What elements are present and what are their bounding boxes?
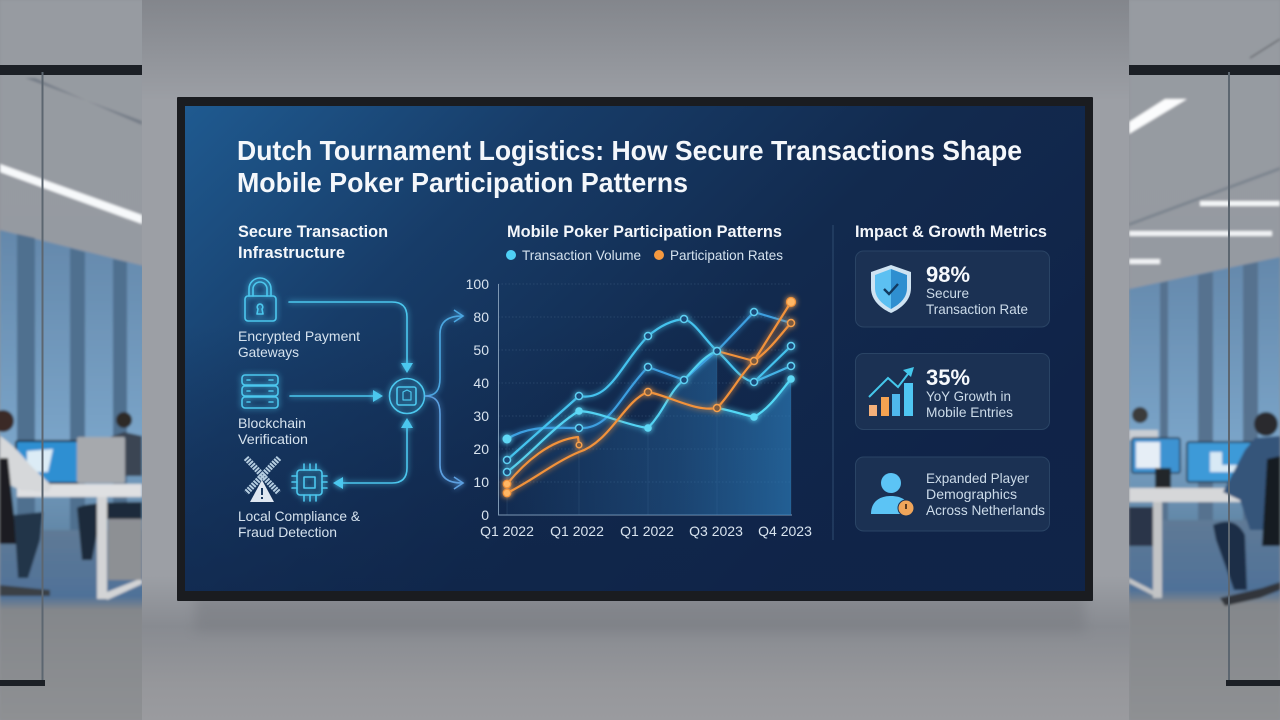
heading: infrastructure: Infrastructure [238,243,345,262]
heading: infrastructure: Secure Transaction [238,222,388,241]
x-axis labels: Q1 2022 [620,523,674,539]
y-axis labels: 10 [473,474,489,490]
label: local compliance and fraud detection: Fraud Detection [238,524,337,540]
arrow: compliance to hub [333,418,413,489]
label: encrypted payment gateways: Encrypted Payment [238,328,360,344]
panel: secure transaction infrastructure [238,222,463,540]
title: Dutch Tournament Logistics: How Secure Transactions Shape [237,135,1022,166]
text: demographics: Across Netherlands [926,502,1045,518]
card: mobile entry growth [856,354,1050,430]
background: left office view [0,0,144,720]
icon: shield [871,265,911,313]
y-axis labels: 40 [473,375,489,391]
label: blockchain verification: Verification [238,431,308,447]
arrow: hub to chart bottom [425,396,463,489]
arrow: gateways to hub [289,302,413,373]
text: 35 percent: Mobile Entries [926,404,1013,420]
label: encrypted payment gateways [238,328,360,360]
text: demographics: Expanded Player [926,470,1029,486]
arrow: hub to chart top [425,310,463,396]
x-axis labels: Q4 2023 [758,523,812,539]
icon: central security hub [390,378,424,414]
label: local compliance and fraud detection [238,508,361,540]
chart: data point markers [502,298,796,497]
card: secure transaction rate [856,251,1050,327]
y-axis labels: 30 [473,408,489,424]
legend: Participation Rates [670,247,783,263]
text: demographics: Demographics [926,486,1017,502]
label: encrypted payment gateways: Gateways [238,344,299,360]
heading: participation patterns: Mobile Poker Participation Patterns [507,222,782,241]
y-axis labels: 100 [466,276,489,292]
icon: microchip [292,464,327,501]
TV shadow [195,596,1085,632]
panel: participation chart [466,222,812,539]
text: 35 percent: 35% [926,365,970,390]
divider [832,225,834,540]
title [237,135,1022,198]
background: right office view [1129,0,1280,720]
label: blockchain verification [238,415,308,447]
x-axis labels: Q3 2023 [689,523,743,539]
icon: windmill [246,458,279,502]
card: player demographics [856,457,1050,531]
chart: gridlines and axes [498,284,792,515]
text: demographics [926,470,1045,518]
text: 98 percent: 98% [926,262,970,287]
text: 35 percent [926,365,1013,420]
heading: infrastructure [238,222,388,262]
y-axis labels: 0 [481,507,489,523]
y-axis labels: 20 [473,441,489,457]
icon: player [871,473,914,516]
series: transaction volume lines [507,312,791,472]
heading: impact metrics: Impact & Growth Metrics [855,222,1047,241]
series: participation rate lines [507,302,791,493]
x-axis labels [480,523,812,539]
panel: impact and growth metrics [855,222,1050,531]
legend: Transaction Volume [522,247,641,263]
display frame [177,97,1093,601]
label: local compliance and fraud detection: Local Compliance & [238,508,361,524]
y-axis labels: 80 [473,309,489,325]
icon: growth chart [869,367,914,416]
icon: server stack [242,375,278,408]
label: blockchain verification: Blockchain [238,415,306,431]
text: 98 percent: Transaction Rate [926,301,1028,317]
text: 35 percent: YoY Growth in [926,388,1011,404]
text: 98 percent [926,262,1028,317]
icon: padlock [245,278,276,321]
arrow: blockchain to hub [290,390,383,402]
y-axis labels: 50 [473,342,489,358]
x-axis labels: Q1 2022 [550,523,604,539]
legend [506,247,783,263]
text: 98 percent: Secure [926,285,969,301]
y-axis labels [466,276,489,523]
wall [142,0,1129,720]
display screen [185,106,1085,591]
title: Mobile Poker Participation Patterns [237,167,688,198]
x-axis labels: Q1 2022 [480,523,534,539]
